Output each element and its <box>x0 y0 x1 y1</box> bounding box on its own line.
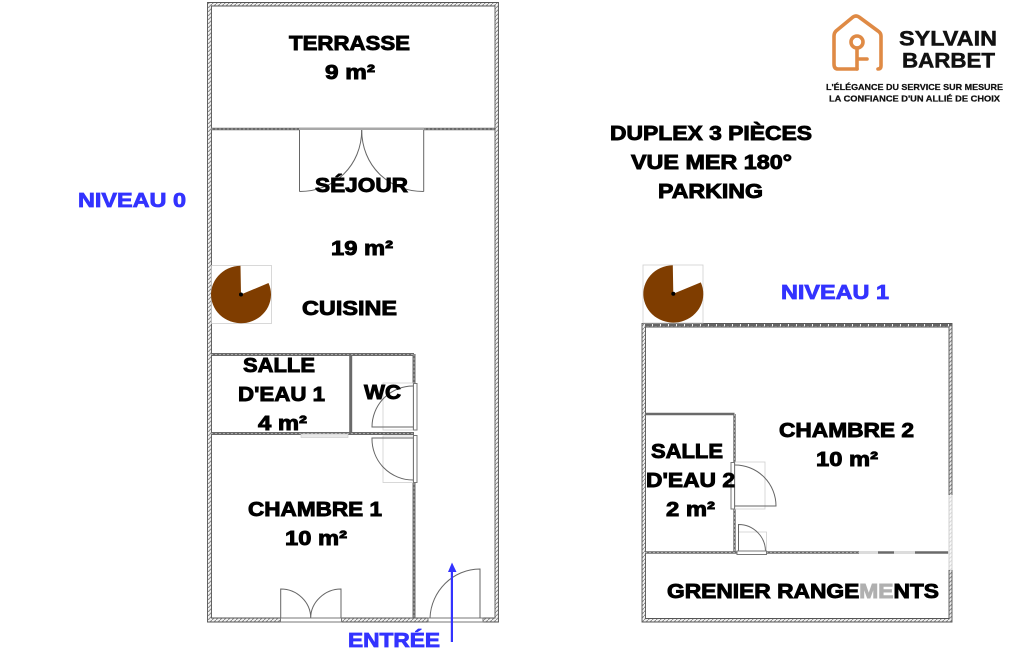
door: chambre 1 double window <box>280 589 342 622</box>
partition: terrace wall <box>211 128 495 130</box>
label: chambre 2 area: 10 m² <box>816 449 878 471</box>
label: niveau 0: NIVEAU 0 <box>78 190 186 212</box>
label: terrasse: TERRASSE <box>289 33 410 55</box>
label: chambre 1: CHAMBRE 1 <box>248 499 382 521</box>
door: chambre 1 <box>372 436 417 482</box>
label: salle d'eau 1 area: 4 m² <box>258 413 307 435</box>
icon: spiral stairs level 0 <box>211 266 272 324</box>
label: terrasse area: 9 m² <box>325 62 375 84</box>
label: séjour: SÉJOUR <box>315 174 409 197</box>
logo: Sylvain Barbet <box>826 16 1003 104</box>
label: salle d'eau 2 area: 2 m² <box>666 499 715 521</box>
icon: house with key <box>834 16 881 69</box>
outer walls level 1 <box>642 324 952 622</box>
label: salle d'eau 1 line 2: D'EAU 1 <box>238 384 325 406</box>
door: bathroom 2 <box>731 462 776 509</box>
heading: listing summary <box>610 122 812 203</box>
label: grenier rangements: GRENIER RANGE MENTS <box>667 581 939 603</box>
logo tagline: LA CONFIANCE D'UN ALLIÉ DE CHOIX <box>829 94 1000 104</box>
label: WC: WC <box>364 382 401 404</box>
label: salle d'eau 1 line 1: SALLE <box>243 355 315 377</box>
icon: spiral stairs level 1 <box>643 265 703 323</box>
outer walls level 0 <box>208 2 498 622</box>
panel: floor plan level 0 <box>208 2 498 622</box>
faded right wall patch <box>948 495 953 570</box>
logo tagline: L'ÉLÉGANCE DU SERVICE SUR MESURE <box>826 82 1003 92</box>
door: terrace double door <box>300 130 424 192</box>
label: salle d'eau 2 line 1: SALLE <box>651 441 723 463</box>
logo wordmark: SYLVAIN <box>899 28 997 50</box>
door: WC <box>372 383 417 430</box>
heading: listing summary: PARKING <box>658 181 763 203</box>
partition: bathroom and WC walls <box>211 354 414 618</box>
logo wordmark <box>899 28 997 72</box>
panel: floor plan level 1 <box>642 265 953 622</box>
heading: listing summary: DUPLEX 3 PIÈCES <box>610 122 812 145</box>
label: salle d'eau 2 line 2: D'EAU 2 <box>646 470 735 492</box>
label: séjour area: 19 m² <box>331 238 393 260</box>
door: attic <box>737 524 766 554</box>
logo tagline <box>826 82 1003 104</box>
label: cuisine: CUISINE <box>302 298 397 320</box>
label: chambre 2: CHAMBRE 2 <box>779 420 914 442</box>
partition: bathroom 2 and attic walls <box>645 325 952 554</box>
label: chambre 1 area: 10 m² <box>285 528 347 550</box>
door: entrance <box>428 569 483 622</box>
label: niveau 1: NIVEAU 1 <box>781 282 889 304</box>
heading: listing summary: VUE MER 180° <box>631 152 792 174</box>
arrow: entrance <box>448 562 456 642</box>
logo wordmark: BARBET <box>902 50 995 72</box>
